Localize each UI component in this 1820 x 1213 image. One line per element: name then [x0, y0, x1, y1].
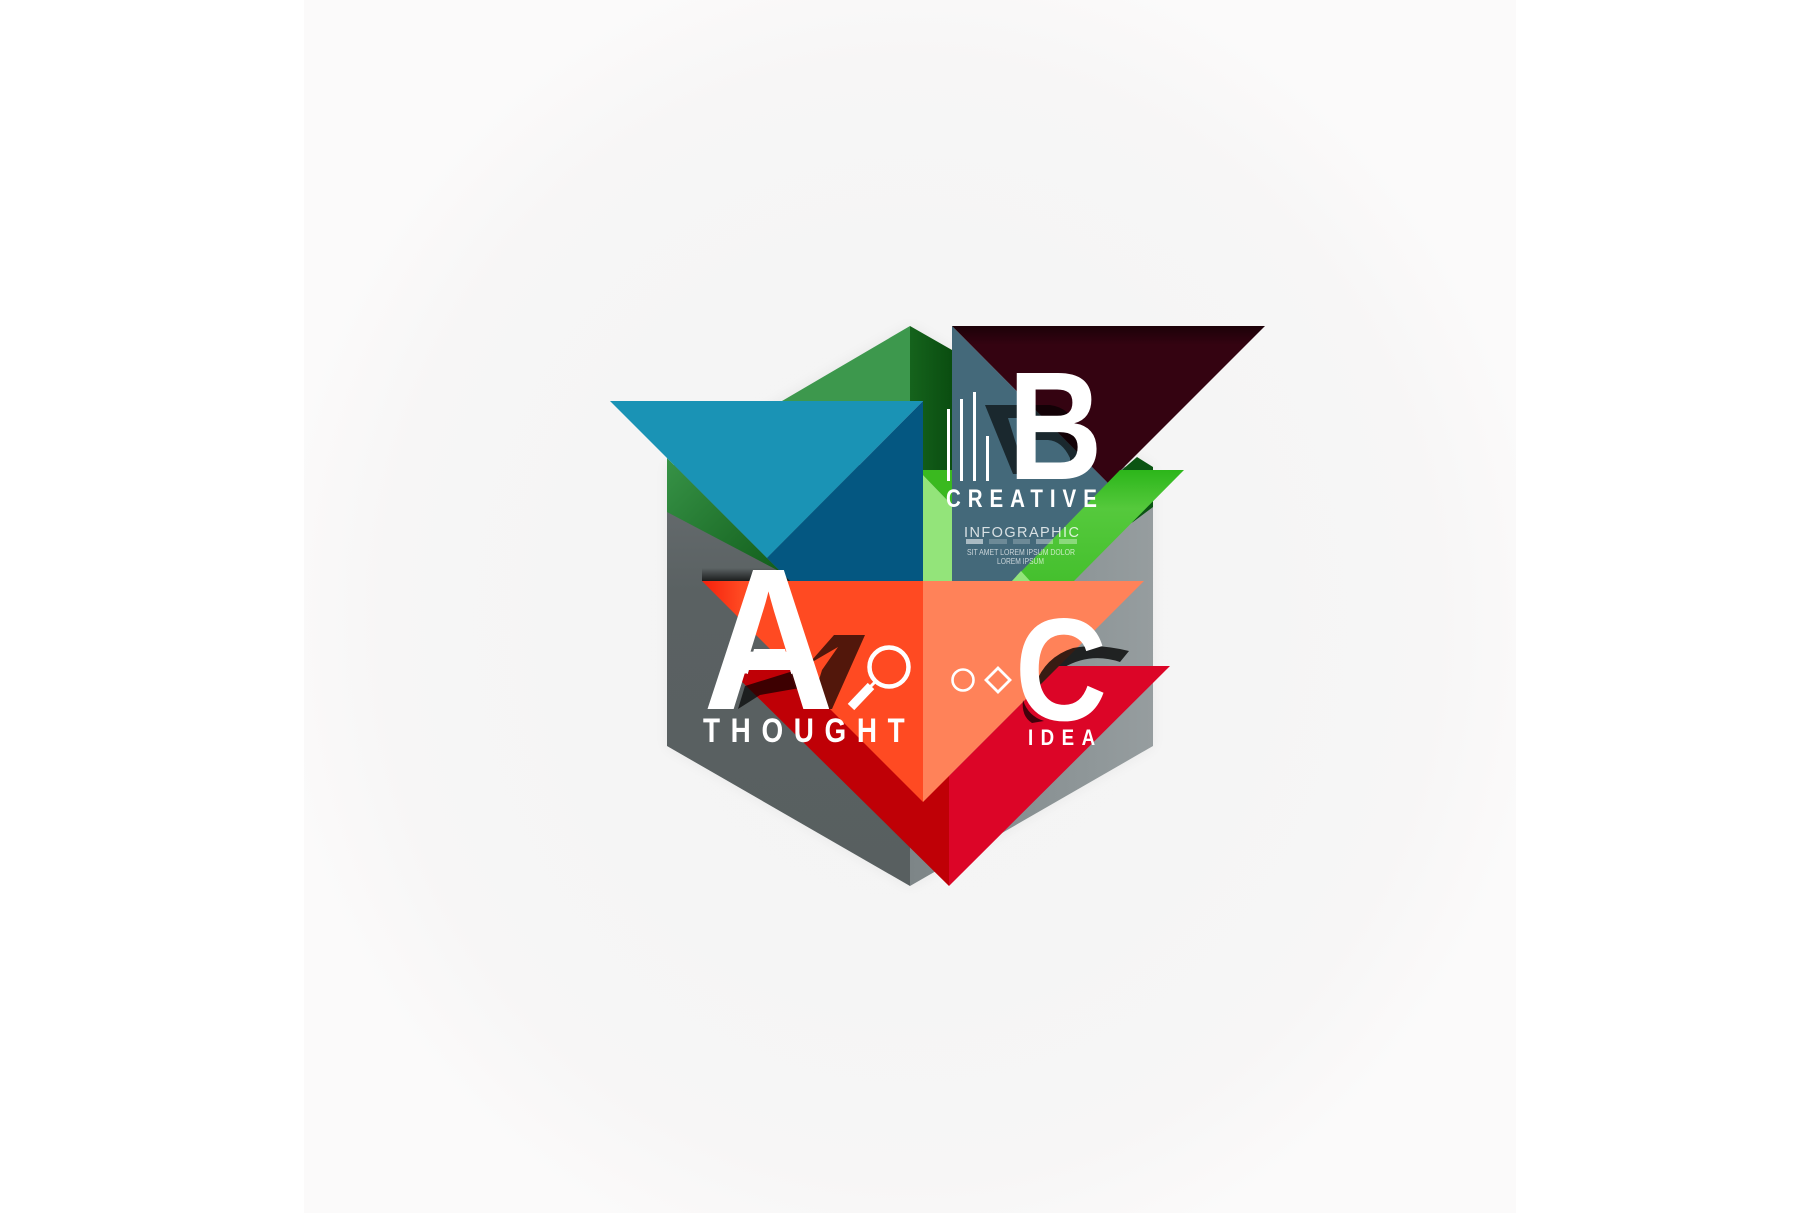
label THOUGHT: THOUGHT: [703, 711, 905, 750]
orange triangle left half: [702, 581, 923, 802]
small light green tip: [1012, 571, 1030, 581]
infographic emblem: [610, 326, 1265, 886]
dark red fold: [730, 659, 949, 886]
letter A raised crossbar: [747, 649, 792, 674]
hexagon right gray face: [910, 465, 1153, 886]
label CREATIVE: CREATIVE: [946, 484, 1097, 512]
background panel: [304, 0, 1516, 1213]
right dark green facet: [1100, 457, 1153, 540]
letter A: A: [703, 526, 834, 752]
letter C shadow: [1035, 646, 1129, 705]
letter B: B: [1008, 340, 1102, 512]
medium green corner: [923, 470, 952, 505]
small caption: SIT AMET LOREM IPSUM DOLOR: [967, 547, 1075, 557]
small caption: LOREM IPSUM: [997, 556, 1044, 566]
top light green facet: [782, 326, 910, 401]
orange triangle right half: [923, 581, 1144, 802]
crimson triangle: [949, 666, 1170, 886]
green diagonal band: [1012, 470, 1184, 581]
small dashes: [966, 539, 1077, 544]
small caption: [967, 547, 1075, 566]
blue triangle light face: [610, 401, 923, 558]
label INFOGRAPHIC: INFOGRAPHIC: [964, 525, 1079, 541]
letter C: C: [1015, 588, 1107, 751]
light green strip: [923, 475, 952, 581]
maroon triangle: [952, 326, 1265, 483]
icon: magnifying glass: [851, 648, 908, 707]
letter B shadow: [985, 405, 1079, 474]
icon: circle: [952, 670, 974, 690]
icon: diamond: [986, 668, 1010, 692]
label IDEA: IDEA: [1028, 727, 1095, 750]
soft shadow: [667, 326, 1153, 886]
area under letter A crossbar: [744, 670, 799, 700]
slate panel: [952, 326, 1108, 581]
letter A shadow: [738, 635, 865, 709]
hexagon left gray face: [667, 465, 910, 886]
left green strip: [667, 458, 790, 581]
bar lines icon: [947, 392, 989, 481]
shadow above orange triangle: [702, 568, 790, 581]
blue triangle dark face: [767, 401, 923, 581]
letter C lower shadow: [1023, 700, 1044, 723]
top dark green facet: [910, 326, 952, 581]
